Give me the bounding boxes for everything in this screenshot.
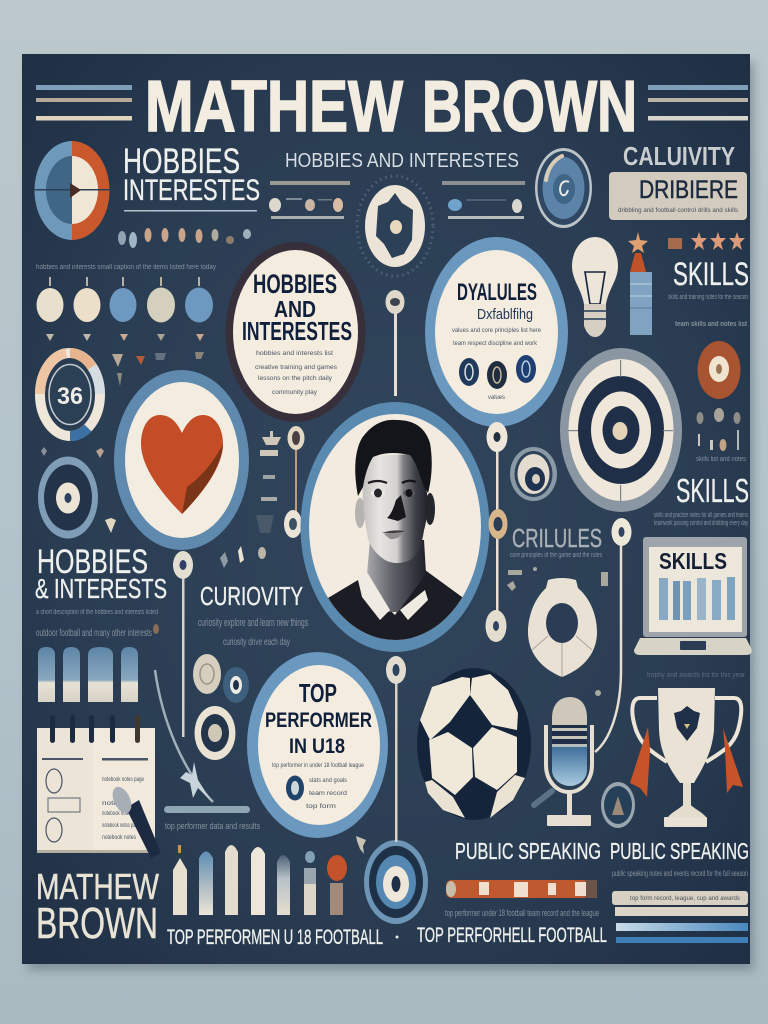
star rating — [668, 232, 745, 250]
dribiere label box — [609, 172, 747, 220]
target icon bottom — [364, 840, 428, 924]
curiovity notes: curiosity explore and learn new things — [198, 617, 308, 629]
arrow platform — [164, 806, 250, 813]
title — [145, 67, 637, 147]
eyes — [371, 490, 385, 496]
connector from hobbies circle — [284, 426, 304, 538]
trophy icon — [630, 688, 743, 827]
sparkle icon — [356, 836, 366, 854]
curiovity notes: curiosity drive each day — [223, 637, 290, 648]
curved arrow — [155, 670, 213, 802]
crilules caption: core principles of the game and the rules — [510, 552, 602, 559]
row of small icons — [118, 228, 251, 248]
connector bottom — [386, 656, 406, 842]
bar chart bottom — [173, 845, 347, 915]
panel: values circle: team respect discipline and work — [453, 340, 538, 347]
orange progress bar — [446, 880, 597, 898]
curiovity heading: CURIOVITY — [200, 581, 303, 611]
panel: hobbies and interestes circle: community play — [272, 389, 318, 396]
center right connector — [486, 422, 508, 642]
panel: top performer circle: stats and goals — [309, 777, 348, 784]
soccer ball large — [417, 668, 531, 820]
hobbies and interests heading lower: HOBBIES — [37, 543, 148, 581]
panel: top performer circle: IN U18 — [289, 735, 345, 758]
gauge icon 36: 36 — [57, 383, 83, 410]
neck — [367, 540, 426, 612]
skills caption small: skills list and notes — [696, 456, 746, 463]
panel: top performer circle: TOP — [299, 678, 337, 708]
caption above dots: hobbies and interests small caption of the items listed here today — [36, 264, 216, 271]
small scattered icons — [507, 567, 608, 591]
mouth — [382, 530, 405, 533]
caption over trophy: trophy and awards list for this year — [647, 672, 746, 679]
hobbies notes lower: outdoor football and many other interests — [36, 628, 152, 639]
small icons under ball — [696, 408, 740, 451]
panel: top performer circle: PERFORMER — [265, 709, 372, 732]
panel: hobbies and interestes circle: INTERESTES — [242, 316, 352, 346]
title: MATHEW — [145, 67, 403, 147]
notebook with pen icon: notebook notes page — [102, 810, 142, 817]
curiovity notes — [198, 617, 308, 648]
panel: top performer circle: team record — [309, 790, 347, 797]
notebook with pen icon — [37, 715, 161, 858]
hair — [355, 420, 432, 496]
caluivity heading: CALUIVITY — [623, 141, 735, 171]
small sparkle icons — [41, 447, 116, 533]
sub heading: hobbies and interestes: HOBBIES AND INTERESTES — [285, 150, 519, 172]
stacked stripes right: top form record, league, cup and awards — [630, 896, 740, 902]
decorative stripes right of title — [648, 85, 748, 120]
bottom name heading: BROWN — [36, 899, 158, 948]
panel: hobbies and interestes circle: creative training and games — [255, 364, 338, 371]
portrait circle — [300, 402, 490, 660]
notebook with pen icon: notebook notes page — [102, 822, 140, 829]
small ring icon — [510, 447, 557, 501]
panel: hobbies and interestes circle: hobbies and interests list — [256, 350, 333, 357]
dribiere label box: DRIBIERE — [639, 176, 738, 204]
bottom name heading: MATHEW — [36, 866, 159, 907]
four bars icon row — [38, 647, 138, 702]
mini circles — [193, 654, 249, 760]
small mid icons — [220, 431, 281, 568]
dribiere label box: dribbling and football control drills and skills — [618, 207, 739, 214]
sweater — [328, 570, 462, 640]
panel: hobbies and interestes circle: AND — [274, 296, 316, 322]
bottle with star icon — [628, 232, 652, 335]
crilules heading: CRILULES — [512, 523, 602, 553]
separator dot — [396, 936, 398, 938]
panel: hobbies and interestes circle: lessons on the pitch daily — [258, 375, 333, 382]
platform caption: top performer data and results — [165, 821, 260, 831]
title: BROWN — [422, 67, 637, 147]
heart circle — [114, 370, 249, 550]
panel: hobbies and interestes circle: HOBBIES — [253, 269, 337, 299]
panel: values circle — [425, 237, 568, 427]
heading: hobbies interestes: INTERESTES — [123, 174, 260, 207]
panel: top performer circle: top performer in under 18 football league — [272, 762, 364, 769]
row of five dot badges — [36, 277, 213, 341]
notebook with pen icon: notebook notes — [102, 834, 137, 841]
bottom name heading — [36, 866, 159, 948]
notebook with pen icon: notes — [102, 800, 123, 807]
panel: top performer circle — [247, 652, 388, 838]
ears — [355, 498, 365, 528]
panel: values circle: values and core principles list here — [452, 327, 541, 334]
small floating icons — [112, 352, 204, 386]
heading: hobbies interestes: HOBBIES — [123, 142, 240, 181]
panel: values circle: values — [488, 394, 506, 401]
connector above portrait — [386, 290, 404, 396]
hobbies notes lower: a short description of the hobbies and interests listed — [36, 609, 158, 616]
skills notes middle — [654, 512, 748, 527]
ring target icon left — [38, 456, 98, 538]
blue swirl dial icon — [535, 148, 592, 228]
hobbies and interests heading lower — [35, 543, 167, 604]
panel: values circle: DYALULES — [457, 279, 537, 306]
heading: hobbies interestes — [123, 142, 260, 212]
panel: hobbies and interestes circle — [226, 242, 366, 422]
orange ball icon — [698, 341, 740, 399]
bar caption: top performer under 18 football team record and the league — [445, 908, 599, 918]
laptop skills chart — [634, 537, 752, 655]
nose shadow — [387, 495, 406, 521]
small football shape — [528, 578, 597, 677]
face — [363, 454, 427, 563]
light bulb icon — [572, 237, 618, 337]
top performhell heading: TOP PERFORHELL FOOTBALL — [417, 924, 607, 947]
top performen heading: TOP PERFORMEN U 18 FOOTBALL — [167, 926, 383, 949]
decorative stripes left of title — [36, 85, 132, 120]
medal icon — [601, 782, 635, 828]
collar — [358, 572, 390, 620]
mini slider right — [442, 181, 525, 219]
laptop skills chart: SKILLS — [659, 548, 727, 574]
gauge icon 36 — [40, 353, 100, 436]
target icon — [560, 348, 682, 512]
panel: values circle: Dxfablfihg — [477, 306, 533, 323]
connector with node left — [173, 551, 193, 737]
connector right curve — [595, 518, 632, 752]
hobbies notes lower — [36, 609, 159, 639]
skills notes — [668, 294, 748, 328]
hobbies and interests heading lower: & INTERESTS — [35, 573, 167, 604]
stacked stripes right — [612, 891, 748, 943]
brows — [368, 481, 387, 483]
mini slider left — [269, 181, 350, 219]
skills notes: team skills and notes list — [675, 321, 748, 328]
donut chart icon — [35, 141, 110, 240]
microphone icon — [534, 690, 601, 826]
panel: top performer circle: top form — [306, 803, 336, 810]
gear circle icon — [357, 176, 433, 276]
notebook with pen icon: notebook notes page — [102, 776, 144, 783]
public speaking headings: PUBLIC SPEAKING — [455, 838, 601, 864]
